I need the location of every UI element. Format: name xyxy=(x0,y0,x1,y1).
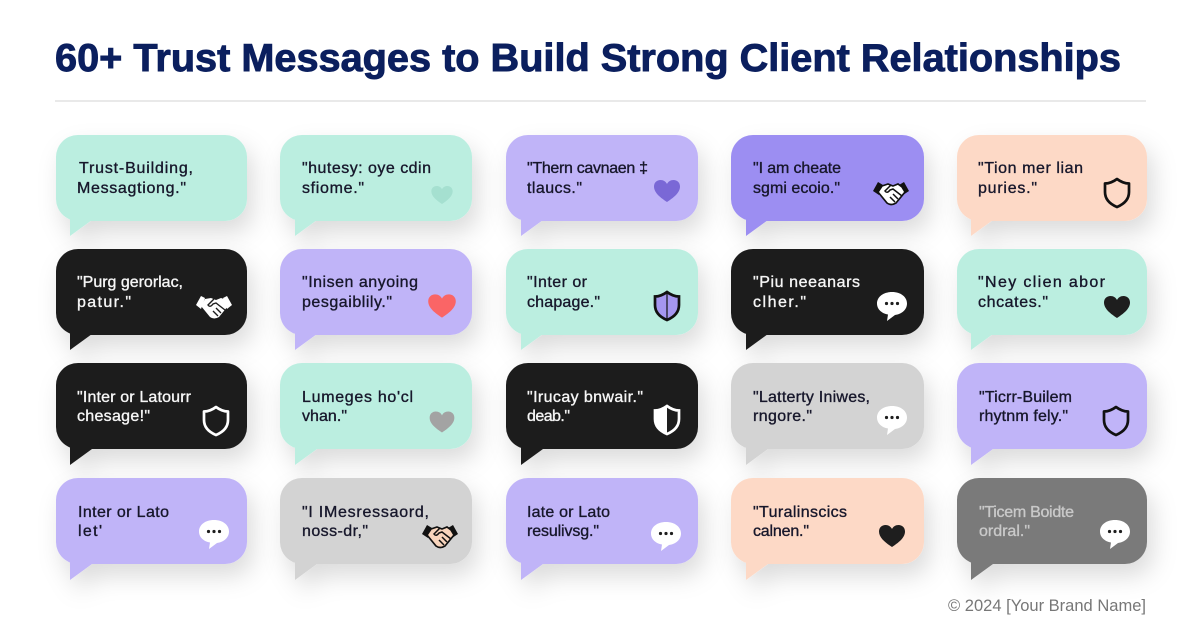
bubble: row 2 column 1 black xyxy=(56,249,247,350)
bubble: row 2 column 3 mint xyxy=(506,249,698,350)
bubble: row 1 column 1 mint xyxy=(56,135,247,236)
icon: shield outline xyxy=(1104,407,1128,435)
bubble: row 1 column 4 purple: sgmi ecoio." xyxy=(753,180,840,197)
bubble: row 1 column 2 mint xyxy=(280,135,472,236)
bubble: row 2 column 4 black: clher." xyxy=(753,294,806,311)
bubble: row 4 column 5 dark gray xyxy=(957,478,1147,580)
bubble: row 3 column 2 mint: Lumeges ho'cl xyxy=(302,389,413,406)
icon: chat xyxy=(199,520,229,549)
bubble: row 4 column 2 gray xyxy=(280,478,472,580)
bubble: row 2 column 2 lavender: "Inisen anyoing xyxy=(302,274,418,291)
bubble: row 3 column 4 gray: rngore." xyxy=(753,408,812,425)
icon: heart xyxy=(654,180,680,202)
bubble: row 4 column 5 dark gray: ordral." xyxy=(979,523,1030,540)
bubble: row 3 column 1 black: chesage!" xyxy=(77,408,150,425)
bubble: row 2 column 5 mint xyxy=(957,249,1147,350)
bubble: row 3 column 3 black: "Irucay bnwair." xyxy=(527,389,643,406)
icon: chat xyxy=(1100,520,1130,549)
bubble: row 1 column 3 lavender: "Thern cavnaen ‡ xyxy=(527,160,648,177)
bubble: row 2 column 2 lavender: pesgaiblily." xyxy=(302,294,392,311)
footer copyright: © 2024 [Your Brand Name] xyxy=(948,596,1146,615)
bubble: row 2 column 1 black: patur." xyxy=(77,294,131,311)
bubble: row 1 column 5 peach xyxy=(957,135,1147,236)
bubble: row 2 column 2 lavender xyxy=(280,249,472,350)
icon: handshake xyxy=(873,182,909,204)
icon: handshake xyxy=(422,525,458,548)
bubble: row 4 column 3 lavender: resulivsg." xyxy=(527,523,599,540)
bubble: row 2 column 4 black xyxy=(731,249,924,350)
bubble: row 4 column 1 lavender: Inter or Lato xyxy=(78,504,169,521)
bubble: row 4 column 2 gray: noss-dr," xyxy=(302,523,368,540)
icon: chat xyxy=(877,406,907,435)
bubble: row 1 column 4 purple xyxy=(731,135,924,236)
bubble: row 3 column 1 black: "Inter or Latourr xyxy=(77,389,192,406)
icon: chat xyxy=(651,522,681,551)
bubble: row 3 column 4 gray: "Latterty Iniwes, xyxy=(753,389,870,406)
icon: heart xyxy=(428,294,456,318)
bubble: row 3 column 5 lavender xyxy=(957,363,1147,465)
bubble: row 3 column 1 black xyxy=(56,363,247,465)
icon: heart xyxy=(431,186,453,204)
bubble: row 4 column 1 lavender: let' xyxy=(78,523,102,540)
bubble: row 2 column 1 black: "Purg gerorlac, xyxy=(77,274,183,291)
icon: heart xyxy=(1104,296,1130,318)
bubble: row 4 column 2 gray: "I IMesressaord, xyxy=(302,504,429,521)
bubble: row 1 column 1 mint: Trust-Building, xyxy=(79,160,193,177)
title: 60+ Trust Messages to Build Strong Client Relationships xyxy=(55,37,1121,80)
bubble: row 1 column 1 mint: Messagtiong." xyxy=(77,180,186,197)
bubble: row 4 column 4 peach xyxy=(731,478,924,580)
bubble: row 2 column 5 mint: "Ney clien abor xyxy=(978,274,1106,291)
bubble: row 3 column 3 black: deab." xyxy=(527,408,570,425)
bubble: row 4 column 5 dark gray: "Ticem Boidte xyxy=(979,504,1074,521)
bubble: row 4 column 3 lavender xyxy=(506,478,698,580)
bubble: row 1 column 4 purple: "I am cheate xyxy=(753,160,841,177)
bubble: row 3 column 2 mint: vhan." xyxy=(302,408,347,425)
bubble: row 4 column 3 lavender: Iate or Lato xyxy=(527,504,610,521)
icon: handshake xyxy=(196,296,232,318)
bubble: row 3 column 5 lavender: rhytnm fely." xyxy=(979,408,1068,425)
bubble: row 3 column 5 lavender: "Ticrr-Builem xyxy=(979,389,1072,406)
bubble: row 3 column 4 gray xyxy=(731,363,924,465)
bubble: row 3 column 3 black xyxy=(506,363,698,465)
icon: chat xyxy=(877,292,907,321)
bubble: row 1 column 5 peach: "Tion mer lian xyxy=(978,160,1083,177)
bubble: row 2 column 3 mint: chapage." xyxy=(527,294,600,311)
bubble: row 1 column 3 lavender: tlaucs." xyxy=(527,180,582,197)
bubble: row 2 column 5 mint: chcates." xyxy=(978,294,1048,311)
bubble: row 4 column 4 peach: calnen." xyxy=(753,523,809,540)
bubble: row 1 column 2 mint: "hutesy: oye cdin xyxy=(302,160,431,177)
bubble: row 2 column 3 mint: "Inter or xyxy=(527,274,588,291)
bubble: row 1 column 2 mint: sfiome." xyxy=(302,180,364,197)
icon: shield outline xyxy=(1105,179,1129,207)
bubble: row 1 column 5 peach: puries." xyxy=(978,180,1037,197)
bubble: row 3 column 2 mint xyxy=(280,363,472,465)
icon: heart xyxy=(430,412,454,432)
bubble: row 4 column 1 lavender xyxy=(56,478,247,580)
bubble: row 4 column 4 peach: "Turalinscics xyxy=(753,504,847,521)
bubble: row 1 column 3 lavender xyxy=(506,135,698,236)
icon: half-filled shield xyxy=(655,406,679,434)
icon: heart xyxy=(879,525,905,547)
bubble: row 2 column 4 black: "Piu neeanars xyxy=(753,274,860,291)
icon: shield purple xyxy=(655,292,679,320)
icon: shield outline xyxy=(204,407,228,435)
